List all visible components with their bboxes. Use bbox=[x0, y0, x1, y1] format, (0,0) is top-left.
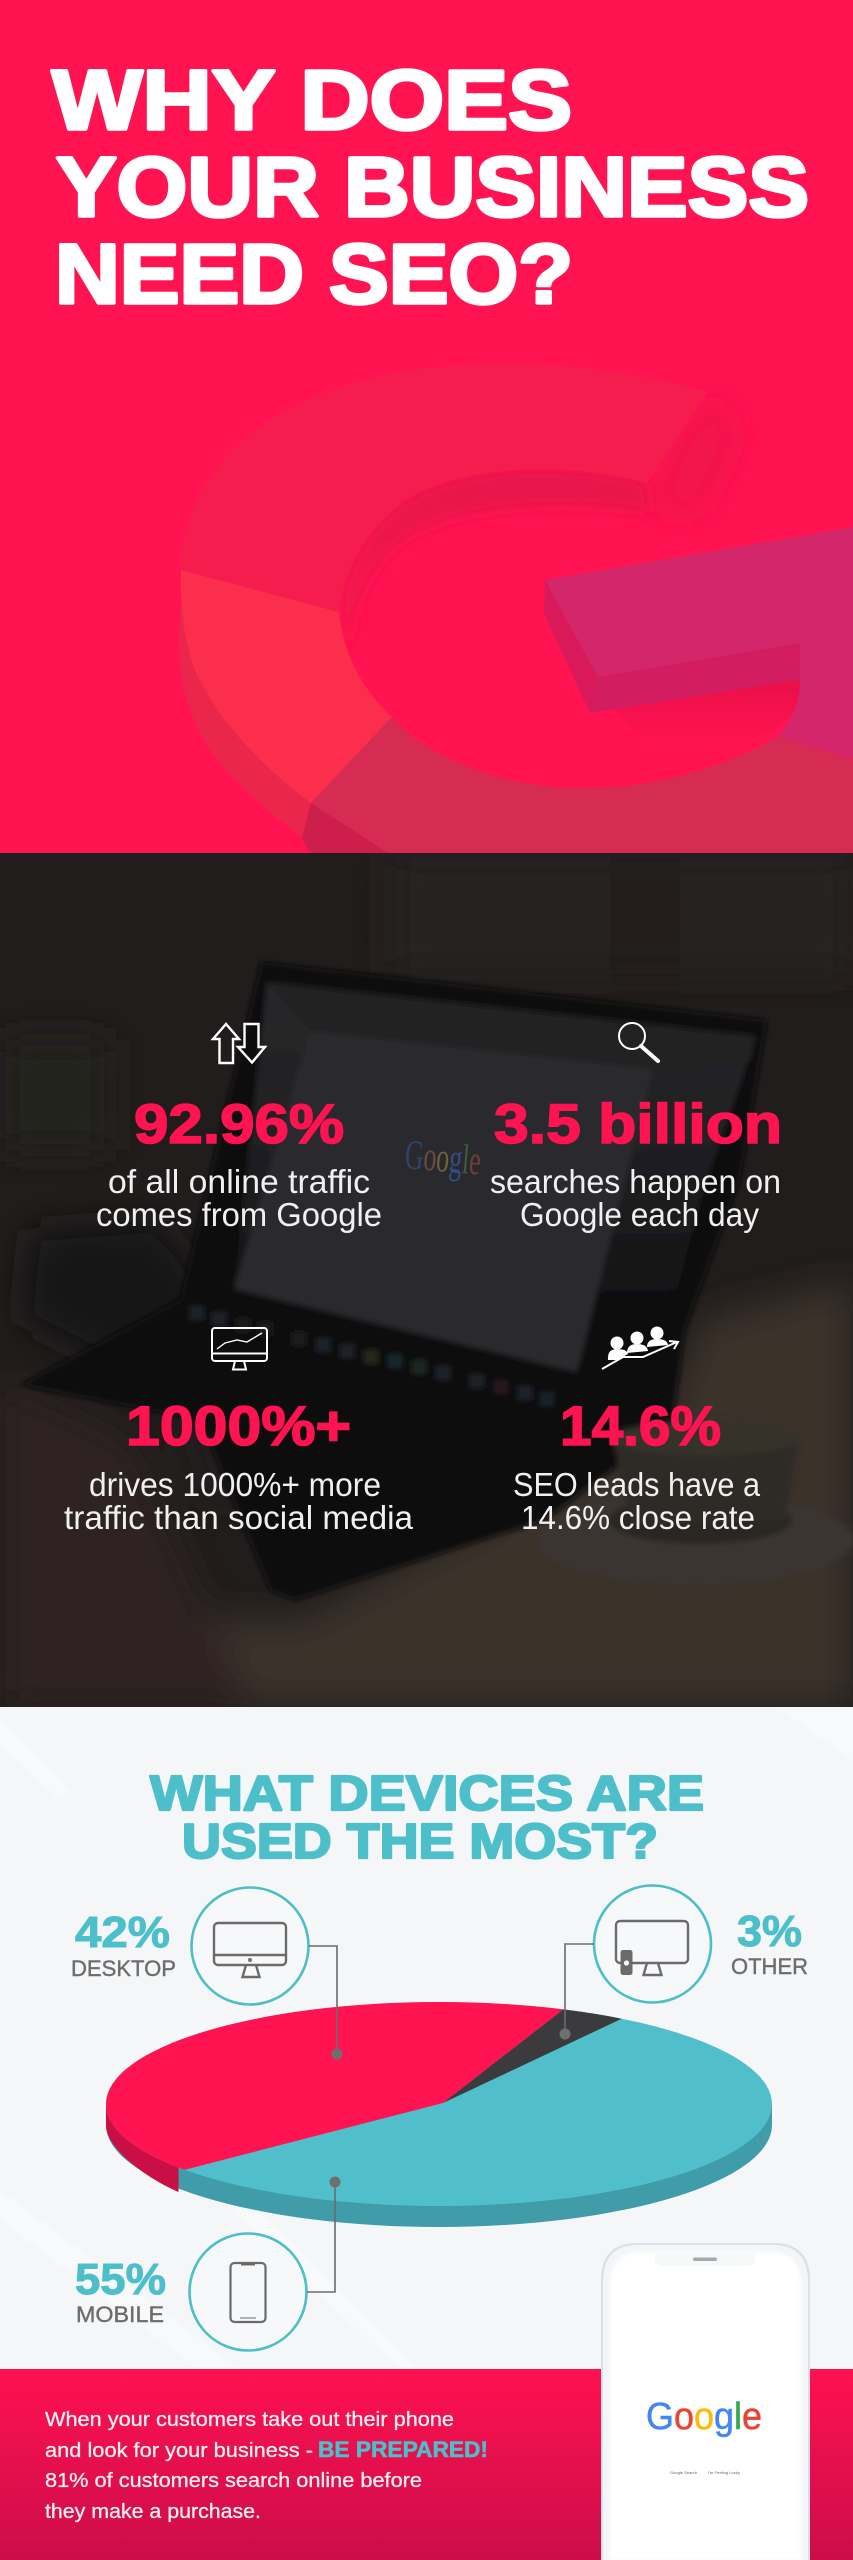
stat: 3.5 billion searches: Google each day bbox=[520, 1196, 759, 1233]
panel: devices section bbox=[0, 1707, 853, 2377]
stat: 3.5 billion searches bbox=[490, 1023, 782, 1233]
buttons: search buttons: I'm Feeling Lucky bbox=[708, 2470, 740, 2475]
icon: up and down arrows bbox=[213, 1024, 265, 1063]
stat: 1000%+ more traffic bbox=[64, 1328, 414, 1536]
title: NEED SEO? bbox=[55, 227, 573, 321]
text: be prepared message bbox=[45, 2408, 488, 2523]
stat: 1000%+ more traffic: 1000%+ bbox=[126, 1394, 351, 1457]
pie chart: device share bbox=[106, 2002, 772, 2227]
stat: 14.6% close rate: 14.6% close rate bbox=[521, 1499, 755, 1536]
text: be prepared message: 81% of customers search online before bbox=[45, 2469, 422, 2492]
stat: 92.96% traffic bbox=[96, 1024, 382, 1233]
stat: 92.96% traffic: comes from Google bbox=[96, 1196, 382, 1233]
stat: 14.6% close rate: 14.6% bbox=[560, 1394, 721, 1457]
icon: people with rising arrow bbox=[602, 1326, 678, 1369]
heading: what devices are used the most bbox=[150, 1767, 704, 1869]
callout: mobile 55%: MOBILE bbox=[76, 2302, 164, 2327]
logo: Google: Google bbox=[646, 2396, 762, 2438]
stat: 3.5 billion searches: 3.5 billion bbox=[494, 1092, 782, 1155]
panel: dark laptop photo with statistics bbox=[0, 853, 853, 1707]
heading: what devices are used the most: USED THE MOST? bbox=[182, 1815, 658, 1869]
icon: monitor with line chart bbox=[212, 1328, 267, 1370]
callout: mobile 55% bbox=[75, 2176, 340, 2350]
screen logo: Google bbox=[403, 1132, 483, 1185]
icon: smartphone bbox=[230, 2263, 266, 2322]
stat: 14.6% close rate: SEO leads have a bbox=[513, 1466, 761, 1503]
graphic: large 3D Google G bbox=[179, 364, 853, 853]
panel: footer banner bbox=[0, 2243, 853, 2560]
title: WHY DOES bbox=[52, 53, 572, 147]
stat: 14.6% close rate bbox=[513, 1326, 761, 1536]
callout: other 3%: 3% bbox=[737, 1907, 802, 1956]
callout: other 3% bbox=[560, 1886, 808, 2040]
text: be prepared message: they make a purchase. bbox=[45, 2500, 261, 2523]
stat: 1000%+ more traffic: traffic than social media bbox=[64, 1499, 414, 1536]
illustration: phone with Google page bbox=[601, 2243, 810, 2560]
buttons: search buttons: Google Search bbox=[670, 2470, 697, 2475]
text: be prepared message: BE PREPARED! bbox=[318, 2437, 488, 2462]
stat: 92.96% traffic: 92.96% bbox=[134, 1092, 344, 1155]
icon: television and remote bbox=[616, 1921, 688, 1975]
heading: what devices are used the most: WHAT DEVICES ARE bbox=[150, 1767, 704, 1821]
callout: desktop 42% bbox=[71, 1888, 342, 2060]
stat: 1000%+ more traffic: drives 1000%+ more bbox=[89, 1466, 381, 1503]
callout: desktop 42%: DESKTOP bbox=[71, 1956, 176, 1981]
stat: 92.96% traffic: of all online traffic bbox=[108, 1163, 370, 1200]
title bbox=[50, 68, 808, 306]
photo: blurred laptop on table bbox=[0, 853, 853, 1707]
icon: desktop monitor bbox=[214, 1923, 286, 1977]
text: be prepared message: and look for your business - bbox=[45, 2439, 313, 2462]
callout: mobile 55%: 55% bbox=[75, 2255, 166, 2304]
callout: other 3%: OTHER bbox=[731, 1954, 808, 1979]
callout: desktop 42%: 42% bbox=[75, 1908, 170, 1957]
panel: hero header bbox=[0, 0, 853, 853]
text: be prepared message: When your customers take out their phone bbox=[45, 2408, 454, 2431]
stat: 3.5 billion searches: searches happen on bbox=[490, 1163, 781, 1200]
icon: magnifying glass bbox=[619, 1023, 658, 1061]
title: YOUR BUSINESS bbox=[56, 140, 809, 234]
buttons: search buttons bbox=[670, 2470, 740, 2475]
